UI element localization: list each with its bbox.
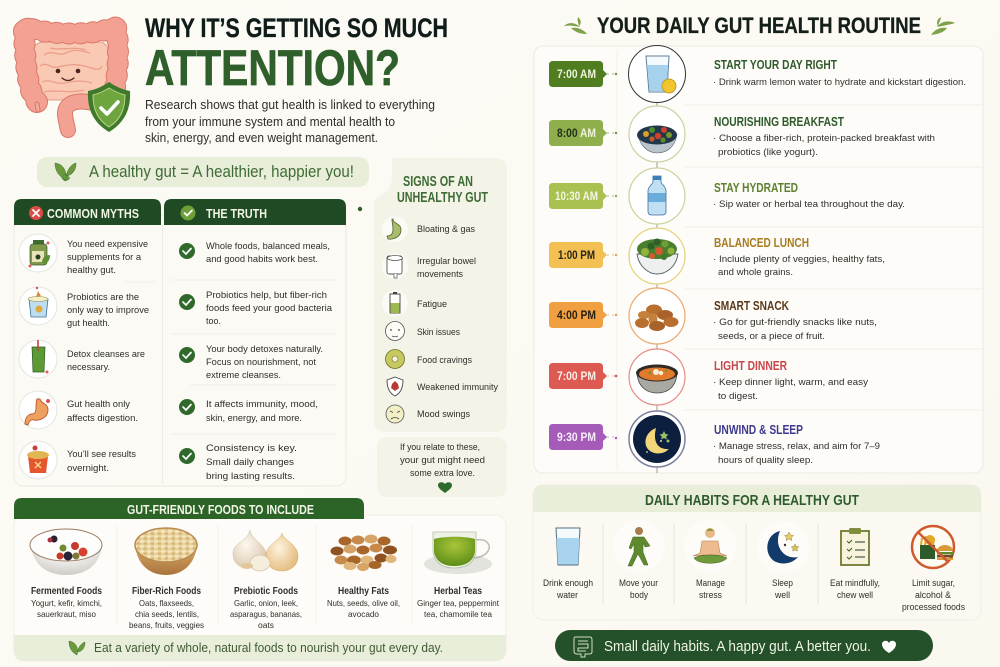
food: fermented (30, 529, 102, 619)
sign: food cravings: Food cravings (417, 355, 472, 365)
row: 7:00 am: · Drink warm lemon water to hydrate and kickstart digestion. (713, 77, 966, 88)
row: 9:30 pm: 9:30 PM (557, 432, 596, 444)
row: 4:00 pm (549, 288, 877, 344)
food: herbal tea (417, 532, 500, 619)
panel: gut-friendly foods (14, 498, 506, 661)
footer pill (555, 630, 933, 661)
callout: extra love: If you relate to these, (400, 442, 480, 452)
intro text (145, 97, 435, 145)
food: prebiotic: Prebiotic Foods (234, 586, 298, 597)
header: common myths: COMMON MYTHS (47, 206, 139, 221)
sign: mood swings (386, 405, 470, 423)
food: prebiotic (230, 530, 302, 630)
habits heading (533, 485, 981, 512)
sign: fatigue: Fatigue (417, 299, 447, 309)
icon: smiling intestine with shield (24, 27, 130, 132)
myth 2: only way to improve (67, 305, 149, 316)
heading: signs: SIGNS OF AN (403, 174, 473, 190)
heading: daily routine: YOUR DAILY GUT HEALTH ROUTINE (597, 13, 921, 38)
callout: extra love (377, 437, 507, 497)
food: fiber-rich (129, 528, 204, 630)
banner: healthy gut (37, 157, 369, 187)
truth 2: foods feed your good bacteria (206, 303, 333, 314)
icon: gut outline (574, 637, 592, 657)
row: 10:30 am: 10:30 AM (555, 191, 598, 203)
habit: sleep: well (774, 590, 790, 600)
myth 1: You need expensive (67, 239, 148, 250)
row: 7:00 pm: 7:00 PM (557, 371, 596, 383)
truth 5: Consistency is key. (206, 443, 297, 454)
sign: irregular bowel: Irregular bowel (417, 256, 476, 266)
habit: manage stress (684, 520, 736, 600)
truth 5: bring lasting results. (206, 471, 295, 482)
food: healthy fats (327, 534, 400, 619)
habit: sleep: Sleep (772, 578, 793, 588)
truth 3 (179, 344, 323, 381)
header: the truth (164, 199, 346, 225)
row: 4:00 pm: SMART SNACK (714, 298, 789, 313)
myth 1 (19, 234, 148, 276)
food: fiber-rich: chia seeds, lentils, (135, 609, 199, 619)
food: fiber-rich: Fiber-Rich Foods (132, 586, 201, 597)
foods footer note (14, 635, 506, 661)
myth 4 (19, 391, 138, 429)
callout: extra love: some extra love. (410, 468, 475, 478)
food: healthy fats: Healthy Fats (338, 586, 389, 597)
truth 3: Focus on nourishment, not (206, 357, 316, 368)
habit: water: water (556, 590, 578, 600)
myth 5: You’ll see results (67, 449, 136, 460)
banner: healthy gut: A healthy gut = A healthier, happier you! (89, 163, 354, 181)
sign: irregular bowel (382, 253, 476, 279)
intro text: skin, energy, and even weight management. (145, 130, 378, 145)
row: 4:00 pm: · Go for gut-friendly snacks like nuts, (713, 317, 877, 328)
truth 4: It affects immunity, mood, (206, 399, 318, 410)
food: healthy fats: avocado (348, 609, 379, 619)
habit: sleep (757, 521, 809, 600)
intro text: Research shows that gut health is linked to everything (145, 97, 435, 112)
myth 5 (19, 441, 136, 479)
food: prebiotic: Garlic, onion, leek, (234, 598, 298, 608)
truth 2: Probiotics help, but fiber-rich (206, 290, 327, 301)
food: herbal tea: Ginger tea, peppermint (417, 598, 500, 608)
truth 4 (179, 399, 318, 424)
habit: manage stress: Manage (696, 578, 725, 588)
habit: limit sugar (902, 526, 965, 612)
truth 2 (179, 290, 333, 327)
row: 7:00 am (549, 46, 966, 102)
myth 2: Probiotics are the (67, 292, 139, 303)
habit: limit sugar: alcohol & (915, 590, 951, 600)
row: 9:30 pm: hours of quality sleep. (718, 455, 813, 466)
myth 2 (19, 287, 149, 329)
row: 7:00 pm (549, 349, 868, 405)
habit: limit sugar: processed foods (902, 602, 965, 612)
foods heading (14, 498, 364, 519)
food: fermented: sauerkraut, miso (37, 609, 96, 619)
habit: water: Drink enough (543, 578, 593, 588)
sign: weakened immunity (387, 377, 498, 396)
row: 9:30 pm (549, 411, 880, 467)
heading: signs: UNHEALTHY GUT (397, 190, 488, 206)
truth 1: Whole foods, balanced meals, (206, 241, 330, 252)
title (145, 13, 448, 96)
truth 3: extreme cleanses. (206, 370, 281, 381)
truth 3: Your body detoxes naturally. (206, 344, 323, 355)
heading: signs (397, 174, 488, 206)
callout: extra love: your gut might need (400, 455, 485, 465)
row: 7:00 am: 7:00 AM (557, 69, 596, 81)
food: prebiotic: asparagus, bananas, (230, 609, 302, 619)
row: 7:00 am: START YOUR DAY RIGHT (714, 57, 837, 72)
footer pill: Small daily habits. A happy gut. A better you. (604, 638, 871, 655)
habit: eat mindfully: chew well (837, 590, 873, 600)
myth 1: healthy gut. (67, 265, 116, 276)
title: WHY IT’S GETTING SO MUCH (145, 13, 448, 43)
row: 9:30 pm: · Manage stress, relax, and aim for 7–9 (713, 441, 880, 452)
habit: move: Move your (619, 578, 658, 588)
panel: routine timeline (534, 46, 983, 473)
row: 7:00 pm: to digest. (718, 391, 758, 402)
row: 1:00 pm (549, 228, 885, 284)
row: 1:00 pm: · Include plenty of veggies, healthy fats, (713, 254, 885, 265)
food: herbal tea: Herbal Teas (434, 586, 482, 597)
truth 2: too. (206, 316, 221, 327)
food: herbal tea: tea, chamomile tea (424, 609, 492, 619)
panel: myths and truth table (14, 199, 346, 486)
foods footer note: Eat a variety of whole, natural foods to nourish your gut every day. (94, 640, 443, 655)
panel: daily habits (533, 485, 981, 620)
myth 2: gut health. (67, 318, 110, 329)
myth 4: Gut health only (67, 399, 130, 410)
sign: weakened immunity: Weakened immunity (417, 382, 498, 392)
food: fiber-rich: Oats, flaxseeds, (139, 598, 194, 608)
row: 10:30 am: STAY HYDRATED (714, 180, 798, 195)
row: 1:00 pm: and whole grains. (718, 267, 793, 278)
row: 4:00 pm: seeds, or a piece of fruit. (718, 331, 825, 342)
header: common myths (14, 199, 161, 225)
food: healthy fats: Nuts, seeds, olive oil, (327, 598, 400, 608)
sign: bloating (382, 216, 475, 242)
food: fermented: Yogurt, kefir, kimchi, (31, 598, 102, 608)
myth 1: supplements for a (67, 252, 142, 263)
sign: irregular bowel: movements (417, 269, 463, 279)
row: 8:00 am: 8:00 AM (557, 128, 596, 140)
sign: skin issues: Skin issues (417, 327, 460, 337)
myth 3 (19, 340, 145, 378)
habit: move: body (630, 590, 648, 600)
row: 8:00 am: · Choose a fiber-rich, protein-packed breakfast with (713, 133, 935, 144)
row: 1:00 pm: BALANCED LUNCH (714, 235, 809, 250)
food: fermented: Fermented Foods (31, 586, 102, 597)
truth 4: skin, energy, and more. (206, 413, 302, 424)
habit: eat mindfully: Eat mindfully, (830, 578, 880, 588)
food: fiber-rich: beans, fruits, veggies (129, 620, 204, 630)
panel: signs of an unhealthy gut (374, 158, 507, 432)
food: prebiotic: oats (258, 620, 274, 630)
sign: mood swings: Mood swings (417, 409, 470, 419)
row: 7:00 pm: · Keep dinner light, warm, and easy (713, 377, 868, 388)
habit: manage stress: stress (699, 590, 722, 600)
row: 4:00 pm: 4:00 PM (557, 310, 596, 322)
foods heading: GUT-FRIENDLY FOODS TO INCLUDE (127, 502, 314, 517)
row: 9:30 pm: UNWIND & SLEEP (714, 422, 803, 437)
row: 7:00 pm: LIGHT DINNER (714, 358, 787, 373)
title: ATTENTION? (145, 40, 400, 96)
habit: water (543, 528, 593, 600)
truth 5 (179, 443, 297, 482)
habit: limit sugar: Limit sugar, (912, 578, 955, 588)
row: 10:30 am (549, 168, 905, 224)
row: 1:00 pm: 1:00 PM (558, 250, 595, 262)
truth 1: and good habits work best. (206, 254, 318, 265)
row: 8:00 am: probiotics (like yogurt). (718, 147, 818, 158)
myth 3: Detox cleanses are (67, 349, 145, 360)
row: 8:00 am (549, 106, 935, 162)
sign: skin issues (386, 322, 460, 340)
myth 5: overnight. (67, 463, 109, 474)
habit: eat mindfully (830, 528, 880, 600)
sign: bloating: Bloating & gas (417, 224, 475, 234)
sign: food cravings (386, 350, 472, 368)
habit: move (613, 520, 665, 600)
myth 3: necessary. (67, 362, 110, 373)
habits heading: DAILY HABITS FOR A HEALTHY GUT (645, 492, 859, 509)
intro text: from your immune system and mental health to (145, 114, 395, 129)
row: 10:30 am: · Sip water or herbal tea throughout the day. (713, 199, 905, 210)
truth 1 (179, 241, 330, 265)
myth 4: affects digestion. (67, 413, 138, 424)
sign: fatigue (382, 290, 447, 316)
row: 8:00 am: NOURISHING BREAKFAST (714, 114, 844, 129)
header: the truth: THE TRUTH (206, 206, 267, 221)
truth 5: Small daily changes (206, 457, 294, 468)
